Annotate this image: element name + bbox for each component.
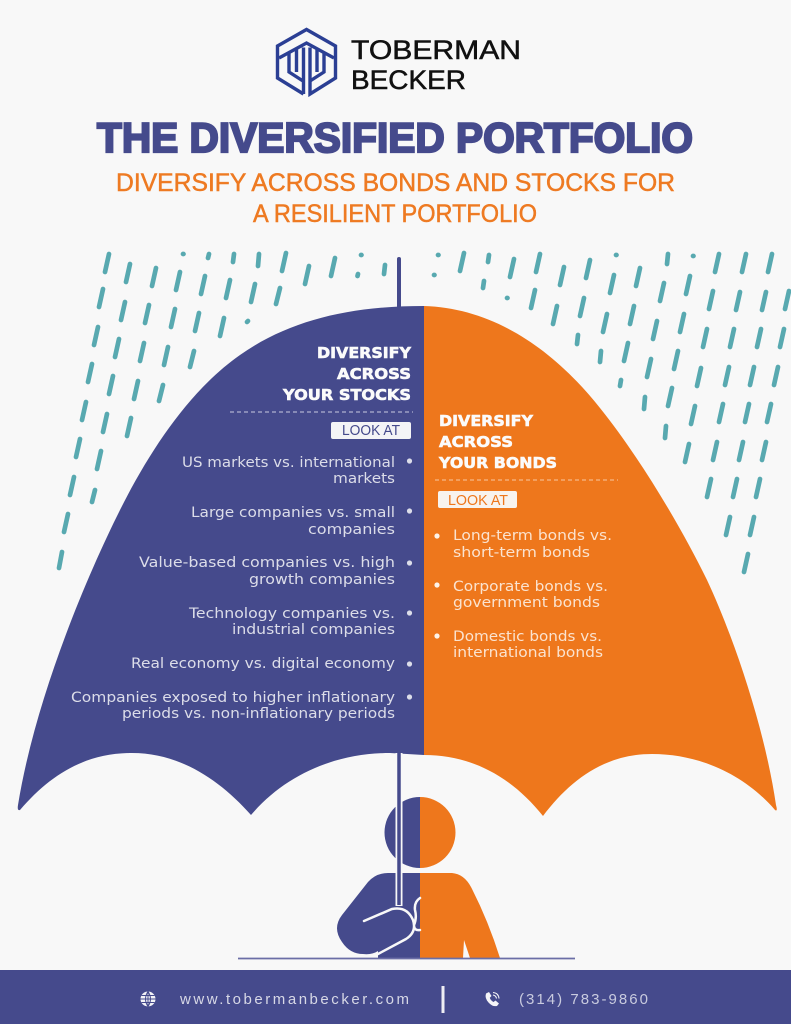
bonds list — [434, 528, 612, 661]
umbrella canopy: bonds half — [424, 306, 777, 816]
brand name: BECKER — [351, 65, 466, 95]
stocks list: periods vs. non-inflationary periods — [122, 706, 395, 722]
bonds list: government bonds — [453, 595, 600, 611]
bonds list: Long-term bonds vs. — [453, 528, 612, 544]
title: THE DIVERSIFIED PORTFOLIO — [97, 114, 693, 161]
stocks list — [71, 455, 412, 722]
umbrella pole top — [397, 259, 401, 310]
stocks list: growth companies — [249, 572, 395, 588]
panel: stocks heading: YOUR STOCKS — [282, 386, 411, 404]
umbrella — [18, 259, 777, 816]
stocks list: Real economy vs. digital economy — [131, 656, 395, 672]
umbrella canopy: stocks half — [18, 306, 424, 815]
stocks list: Companies exposed to higher inflationary — [71, 690, 395, 706]
icon: hexagon logo mark — [278, 30, 336, 94]
stocks list: Technology companies vs. — [188, 606, 395, 622]
bonds list: Domestic bonds vs. — [453, 629, 602, 645]
subtitle: DIVERSIFY ACROSS BONDS AND STOCKS FOR — [116, 169, 675, 197]
footer bar — [0, 970, 791, 1024]
bonds list: Corporate bonds vs. — [453, 579, 608, 595]
bonds: look at tag — [438, 491, 517, 509]
brand name: TOBERMAN — [351, 35, 521, 65]
bonds: look at tag: LOOK AT — [448, 493, 508, 509]
stocks list: US markets vs. international — [182, 455, 395, 471]
panel: stocks heading — [282, 344, 412, 404]
body right — [420, 873, 500, 958]
panel: bonds heading: YOUR BONDS — [438, 454, 557, 472]
icon: phone — [486, 992, 499, 1006]
website: www.tobermanbecker.com — [179, 991, 409, 1008]
brand name — [351, 35, 521, 95]
stocks list: Large companies vs. small — [191, 505, 395, 521]
panel: bonds heading: DIVERSIFY — [439, 412, 534, 430]
bonds list: international bonds — [453, 645, 603, 661]
panel: stocks heading: ACROSS — [337, 365, 411, 383]
stocks list: companies — [308, 522, 395, 538]
body left — [337, 873, 420, 958]
stocks list: industrial companies — [232, 622, 395, 638]
subtitle: A RESILIENT PORTFOLIO — [253, 200, 537, 228]
stocks list: Value-based companies vs. high — [139, 555, 395, 571]
rain drops — [59, 253, 789, 572]
person holding umbrella — [337, 753, 500, 958]
bonds list: short-term bonds — [453, 545, 590, 561]
logo: Toberman Becker — [278, 30, 521, 95]
head — [384, 797, 420, 868]
panel: bonds heading: ACROSS — [439, 433, 513, 451]
phone number: (314) 783-9860 — [519, 991, 648, 1008]
umbrella shaft — [396, 753, 402, 906]
stocks list: markets — [333, 471, 395, 487]
panel: stocks heading: DIVERSIFY — [317, 344, 412, 362]
panel: bonds heading — [438, 412, 557, 472]
ground line — [238, 958, 575, 960]
subtitle — [116, 169, 675, 228]
hand outline — [364, 898, 420, 954]
stocks: look at tag: LOOK AT — [342, 423, 400, 439]
icon: globe — [140, 992, 156, 1006]
